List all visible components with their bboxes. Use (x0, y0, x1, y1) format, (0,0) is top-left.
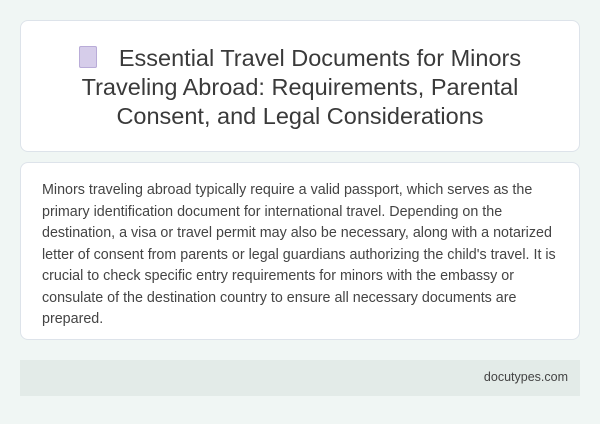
text block: Minors traveling abroad typically require a valid passport, which serves as the primary identification document for international travel. Depending on the destination, a visa or travel permit may also be necessary, along with a notarized letter of consent from parents or legal guardians authorizing the child's travel. It is crucial to check specific entry requirements for minors with the embassy or consulate of the destination country to ensure all necessary documents are prepared. (42, 182, 556, 327)
icon: document (79, 46, 97, 68)
panel: description (20, 162, 580, 340)
panel: title card (20, 20, 580, 152)
footer: docutypes.com (484, 370, 568, 384)
footer (20, 360, 580, 396)
title: Essential Travel Documents for Minors Traveling Abroad: Requirements, Parental Consent, and Legal Considerations (82, 45, 521, 129)
